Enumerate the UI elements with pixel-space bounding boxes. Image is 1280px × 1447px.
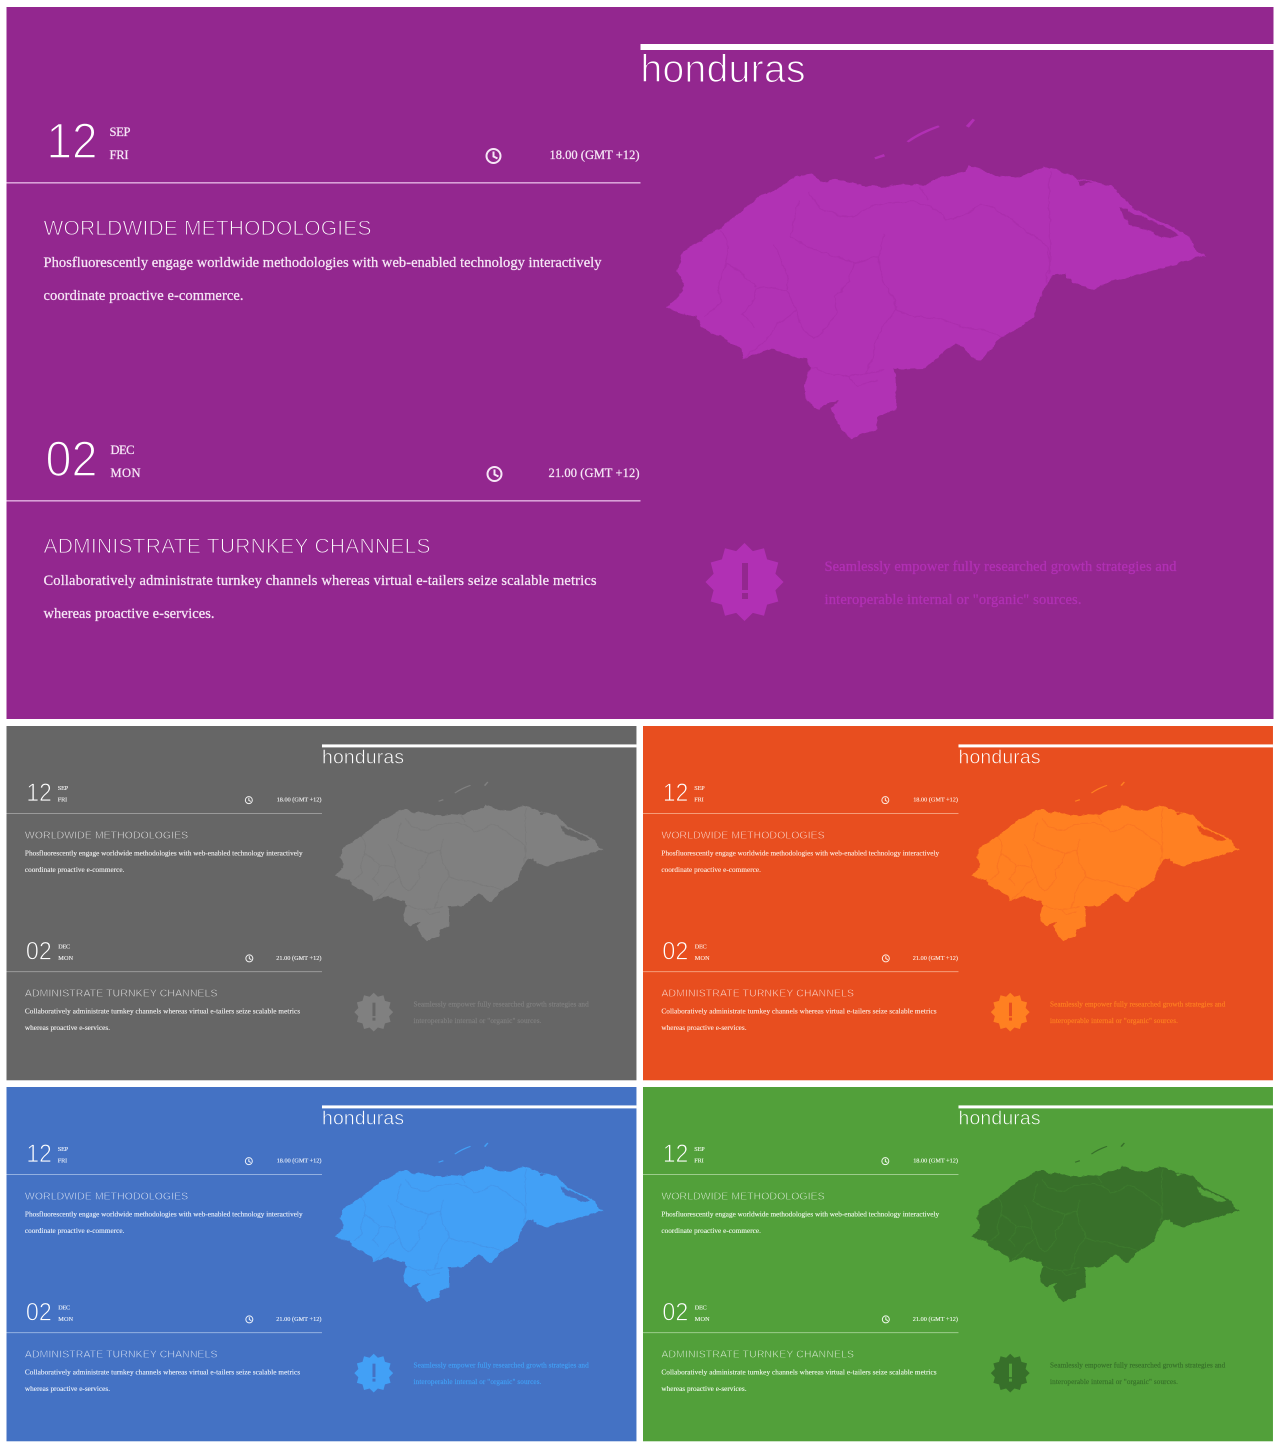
callout: alert: Seamlessly empower fully researched growth strategies and xyxy=(824,559,1177,575)
event: 12 SEP: 12 xyxy=(663,779,688,807)
event: 02 DEC: DEC xyxy=(58,943,70,950)
event: 12 SEP: 18.00 (GMT +12) xyxy=(277,797,321,804)
event: 02 DEC: DEC xyxy=(110,443,134,457)
event: 02 DEC: 21.00 (GMT +12) xyxy=(548,466,640,480)
event: 02 DEC: Collaboratively administrate turnkey channels whereas virtual e-tailers seize scalable metrics xyxy=(44,573,597,589)
event: 02 DEC: whereas proactive e-services. xyxy=(25,1024,110,1032)
event: 12 SEP: SEP xyxy=(58,1146,69,1153)
panel: gray slide xyxy=(6,726,636,1080)
event: 02 DEC: whereas proactive e-services. xyxy=(661,1385,747,1393)
event: 12 SEP: WORLDWIDE METHODOLOGIES xyxy=(25,830,188,841)
callout: alert: Seamlessly empower fully researched growth strategies and xyxy=(414,1362,589,1370)
map: Honduras xyxy=(971,1143,1240,1302)
event: 12 SEP: coordinate proactive e-commerce. xyxy=(661,1227,761,1235)
map: Honduras xyxy=(335,782,604,941)
event: 12 SEP: coordinate proactive e-commerce. xyxy=(44,288,244,304)
event: 02 DEC: 02 xyxy=(662,937,688,965)
event: 12 SEP: 12 xyxy=(663,1140,688,1168)
event: 12 SEP xyxy=(6,779,322,874)
event: 02 DEC: MON xyxy=(695,955,710,962)
event: 02 DEC: DEC xyxy=(695,943,707,950)
event: 12 SEP: WORLDWIDE METHODOLOGIES xyxy=(661,830,825,841)
event: 12 SEP xyxy=(643,779,958,874)
event: 02 DEC: ADMINISTRATE TURNKEY CHANNELS xyxy=(25,1350,218,1361)
event: 02 DEC: ADMINISTRATE TURNKEY CHANNELS xyxy=(661,1350,854,1361)
event: 12 SEP: 12 xyxy=(46,113,98,169)
map: Honduras xyxy=(971,782,1240,941)
event: 12 SEP: WORLDWIDE METHODOLOGIES xyxy=(44,217,372,240)
callout: alert: interoperable internal or "organic" sources. xyxy=(414,1017,542,1025)
event: 02 DEC: DEC xyxy=(58,1304,70,1311)
event: 02 DEC: whereas proactive e-services. xyxy=(44,606,214,622)
callout: alert: interoperable internal or "organic" sources. xyxy=(414,1378,542,1386)
title bar: honduras: honduras xyxy=(322,746,404,768)
event: 02 DEC: whereas proactive e-services. xyxy=(25,1385,110,1393)
event: 02 DEC: 21.00 (GMT +12) xyxy=(913,955,958,962)
event: 02 DEC: Collaboratively administrate turnkey channels whereas virtual e-tailers seize scalable metrics xyxy=(25,1008,300,1016)
event: 02 DEC: 02 xyxy=(26,937,52,965)
title bar: honduras: honduras xyxy=(322,1107,404,1129)
panel: orange slide xyxy=(643,726,1273,1080)
event: 12 SEP: coordinate proactive e-commerce. xyxy=(25,866,125,874)
event: 12 SEP: Phosfluorescently engage worldwide methodologies with web-enabled technology interactively xyxy=(661,1210,939,1218)
event: 02 DEC: 02 xyxy=(662,1298,688,1326)
callout: alert: interoperable internal or "organic" sources. xyxy=(1050,1017,1178,1025)
callout: alert xyxy=(991,993,1226,1032)
event: 02 DEC: MON xyxy=(58,1316,74,1323)
event: 02 DEC: whereas proactive e-services. xyxy=(661,1024,747,1032)
callout: alert xyxy=(354,1354,589,1393)
event: 12 SEP: WORLDWIDE METHODOLOGIES xyxy=(25,1191,188,1202)
event: 12 SEP: coordinate proactive e-commerce. xyxy=(25,1227,125,1235)
event: 02 DEC xyxy=(643,1298,958,1393)
title bar: honduras: honduras xyxy=(958,1107,1041,1129)
event: 12 SEP: Phosfluorescently engage worldwide methodologies with web-enabled technology interactively xyxy=(661,849,939,857)
title bar: honduras: honduras xyxy=(640,48,806,91)
event: 02 DEC: DEC xyxy=(695,1304,707,1311)
callout: alert: Seamlessly empower fully researched growth strategies and xyxy=(414,1001,589,1009)
event: 12 SEP: SEP xyxy=(58,785,69,792)
event: 12 SEP: WORLDWIDE METHODOLOGIES xyxy=(661,1191,825,1202)
event: 12 SEP: 18.00 (GMT +12) xyxy=(277,1158,321,1165)
event: 12 SEP: Phosfluorescently engage worldwide methodologies with web-enabled technology interactively xyxy=(44,255,602,271)
event: 02 DEC: MON xyxy=(110,466,140,480)
callout: alert: Seamlessly empower fully researched growth strategies and xyxy=(1050,1362,1226,1370)
event: 12 SEP: Phosfluorescently engage worldwide methodologies with web-enabled technology interactively xyxy=(25,1210,303,1218)
event: 02 DEC: ADMINISTRATE TURNKEY CHANNELS xyxy=(44,535,430,558)
event: 02 DEC: Collaboratively administrate turnkey channels whereas virtual e-tailers seize scalable metrics xyxy=(25,1369,300,1377)
event: 02 DEC xyxy=(6,1298,322,1393)
event: 12 SEP: FRI xyxy=(58,797,67,804)
event: 12 SEP: 12 xyxy=(26,1140,52,1168)
event: 02 DEC xyxy=(6,937,322,1032)
callout: alert: interoperable internal or "organic" sources. xyxy=(824,592,1082,608)
callout: alert: interoperable internal or "organic" sources. xyxy=(1050,1378,1178,1386)
event: 02 DEC: 02 xyxy=(26,1298,52,1326)
callout: alert xyxy=(991,1354,1226,1393)
panel: blue slide xyxy=(6,1087,636,1441)
panel: purple main slide xyxy=(6,7,1274,719)
event: 12 SEP: 18.00 (GMT +12) xyxy=(913,1158,958,1165)
event: 12 SEP xyxy=(6,113,640,304)
event: 02 DEC xyxy=(643,937,958,1032)
event: 12 SEP: SEP xyxy=(694,785,705,792)
event: 12 SEP: SEP xyxy=(110,125,131,139)
event: 02 DEC xyxy=(6,431,640,622)
event: 02 DEC: 21.00 (GMT +12) xyxy=(913,1316,958,1323)
event: 12 SEP: coordinate proactive e-commerce. xyxy=(661,866,761,874)
event: 02 DEC: ADMINISTRATE TURNKEY CHANNELS xyxy=(661,989,854,1000)
callout: alert: Seamlessly empower fully researched growth strategies and xyxy=(1050,1001,1226,1009)
callout: alert xyxy=(706,543,1177,621)
event: 12 SEP: FRI xyxy=(58,1158,67,1165)
event: 12 SEP: 12 xyxy=(26,779,52,807)
title bar: honduras xyxy=(640,44,1274,91)
event: 02 DEC: 21.00 (GMT +12) xyxy=(276,1316,321,1323)
callout: alert xyxy=(354,993,589,1032)
event: 12 SEP: FRI xyxy=(694,1158,704,1165)
event: 12 SEP xyxy=(643,1140,958,1235)
event: 12 SEP: Phosfluorescently engage worldwide methodologies with web-enabled technology interactively xyxy=(25,849,303,857)
event: 12 SEP: SEP xyxy=(694,1146,705,1153)
event: 02 DEC: ADMINISTRATE TURNKEY CHANNELS xyxy=(25,989,218,1000)
event: 02 DEC: MON xyxy=(695,1316,710,1323)
event: 12 SEP xyxy=(6,1140,322,1235)
event: 02 DEC: Collaboratively administrate turnkey channels whereas virtual e-tailers seize scalable metrics xyxy=(661,1008,937,1016)
event: 02 DEC: 02 xyxy=(46,431,98,487)
map: Honduras xyxy=(666,119,1206,438)
event: 02 DEC: MON xyxy=(58,955,74,962)
title bar: honduras: honduras xyxy=(958,746,1041,768)
event: 12 SEP: 18.00 (GMT +12) xyxy=(913,797,958,804)
event: 02 DEC: Collaboratively administrate turnkey channels whereas virtual e-tailers seize scalable metrics xyxy=(661,1369,937,1377)
event: 12 SEP: FRI xyxy=(694,797,704,804)
map: Honduras xyxy=(335,1143,604,1302)
event: 12 SEP: 18.00 (GMT +12) xyxy=(550,148,640,162)
event: 02 DEC: 21.00 (GMT +12) xyxy=(276,955,321,962)
event: 12 SEP: FRI xyxy=(110,148,128,162)
panel: green slide xyxy=(643,1087,1273,1441)
